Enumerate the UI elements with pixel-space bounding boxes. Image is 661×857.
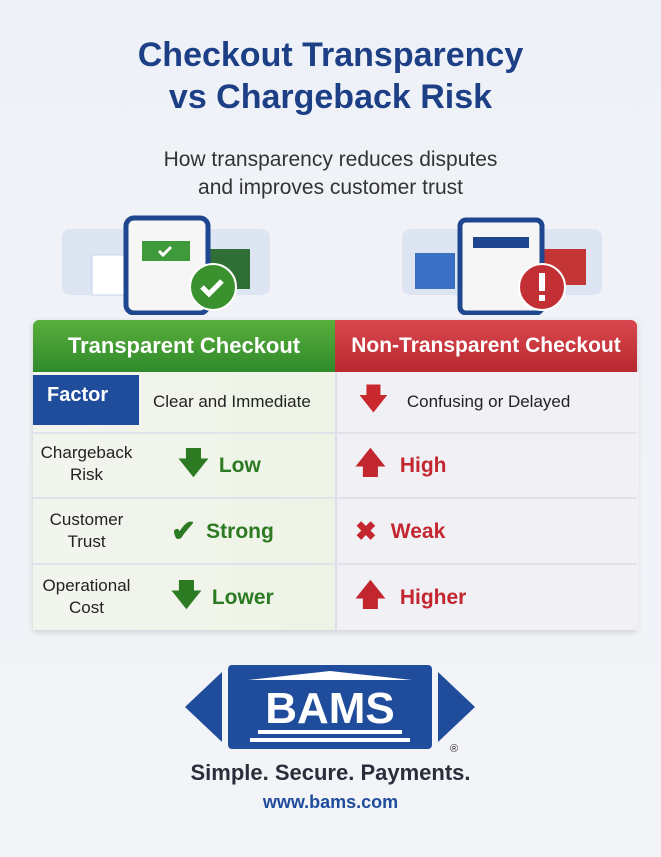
row: chargeback risk: 🡅 (355, 446, 386, 480)
logo: BAMS: ® (450, 743, 458, 755)
header: non-transparent: Non-Transparent Checkout (351, 334, 621, 357)
header: non-transparent (335, 320, 637, 372)
row: factor: Confusing or Delayed (407, 392, 570, 411)
row: chargeback risk: Risk (70, 465, 103, 484)
row: customer trust (33, 497, 637, 564)
row: operational cost: Cost (69, 598, 104, 617)
subtitle (164, 148, 497, 199)
title: Checkout Transparency (138, 36, 523, 74)
row: factor: Factor (47, 384, 108, 406)
row: customer trust: Strong (206, 520, 274, 542)
header: transparent: Transparent Checkout (68, 333, 300, 358)
tagline: Simple. Secure. Payments. (190, 760, 471, 785)
row: chargeback risk: Chargeback (41, 443, 132, 462)
subtitle: and improves customer trust (198, 176, 463, 199)
row: customer trust: Weak (391, 520, 445, 542)
title (138, 36, 524, 116)
header: transparent (33, 320, 335, 372)
row: operational cost: 🡅 (355, 578, 386, 612)
row: chargeback risk (33, 432, 637, 498)
row: customer trust: Customer (50, 510, 123, 529)
row: operational cost: Higher (400, 586, 466, 609)
row: operational cost (33, 563, 637, 631)
row: factor (33, 375, 570, 425)
row: customer trust: ✔ (171, 515, 196, 548)
title: vs Chargeback Risk (169, 78, 492, 116)
subtitle: How transparency reduces disputes (164, 148, 497, 171)
table (33, 320, 637, 630)
illustration: non-transparent checkout (402, 218, 602, 315)
row: chargeback risk: High (400, 454, 446, 477)
row: factor: 🡇 (358, 382, 389, 416)
row: operational cost: Lower (212, 586, 274, 609)
row: customer trust: Trust (67, 532, 106, 551)
logo: BAMS: BAMS (265, 684, 395, 733)
row: chargeback risk: 🡇 (178, 446, 209, 480)
row: operational cost: Operational (43, 576, 130, 595)
illustration: transparent checkout (62, 216, 270, 315)
row: operational cost: 🡇 (171, 578, 202, 612)
url: www.bams.com (263, 792, 398, 812)
logo: BAMS (185, 665, 475, 755)
row: factor: Clear and Immediate (153, 392, 311, 411)
row: chargeback risk: Low (219, 454, 261, 477)
row: customer trust: ✖ (355, 516, 377, 546)
